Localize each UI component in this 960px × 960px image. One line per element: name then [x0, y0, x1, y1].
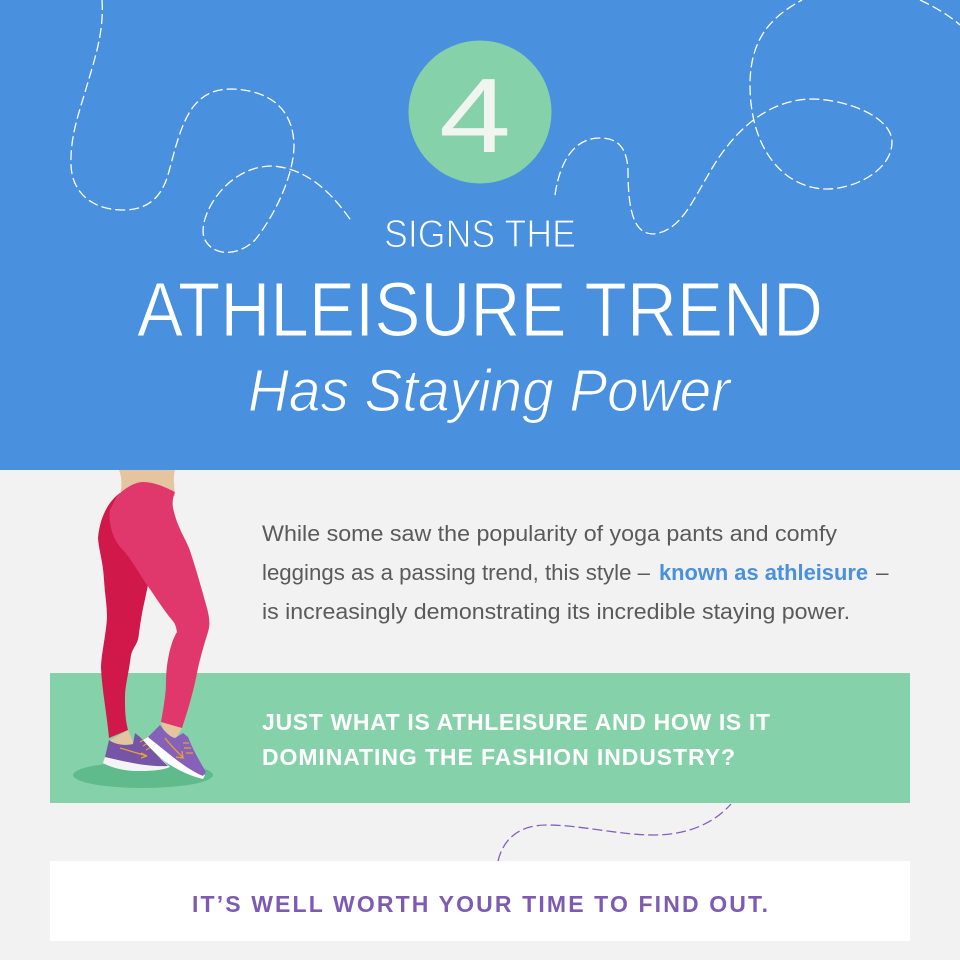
intro paragraph: leggings as a passing trend, this style – — [262, 560, 650, 585]
skin: waist — [119, 470, 175, 496]
title line: has staying power: Has Staying Power — [248, 358, 732, 424]
green question banner: DOMINATING THE FASHION INDUSTRY? — [262, 744, 735, 770]
number badge — [408, 40, 552, 184]
intro paragraph — [262, 521, 889, 624]
header panel — [0, 0, 960, 470]
intro paragraph: is increasingly demonstrating its incredible staying power. — [262, 599, 850, 624]
front leg — [110, 482, 209, 728]
back shoe — [103, 733, 170, 771]
back leg — [98, 493, 148, 738]
skin: ankles — [109, 722, 182, 745]
front shoe — [143, 725, 206, 779]
white callout: IT’S WELL WORTH YOUR TIME TO FIND OUT. — [192, 891, 768, 917]
intro paragraph: – — [876, 560, 889, 585]
green question banner: JUST WHAT IS ATHLEISURE AND HOW IS IT — [262, 709, 770, 735]
number badge: 4 — [439, 57, 511, 175]
dashed line: right squiggle — [555, 0, 960, 234]
intro paragraph: known as athleisure — [659, 560, 868, 585]
dashed line: purple connector — [498, 804, 731, 861]
shadow — [73, 762, 213, 788]
white callout — [50, 861, 910, 941]
dashed line: left squiggle — [71, 0, 352, 252]
illustration: legs in leggings — [73, 470, 213, 788]
intro paragraph: While some saw the popularity of yoga pants and comfy — [262, 521, 838, 546]
title line: signs the: SIGNS THE — [384, 213, 576, 256]
green question banner — [50, 673, 910, 803]
title line: athleisure trend: ATHLEISURE TREND — [137, 267, 823, 353]
